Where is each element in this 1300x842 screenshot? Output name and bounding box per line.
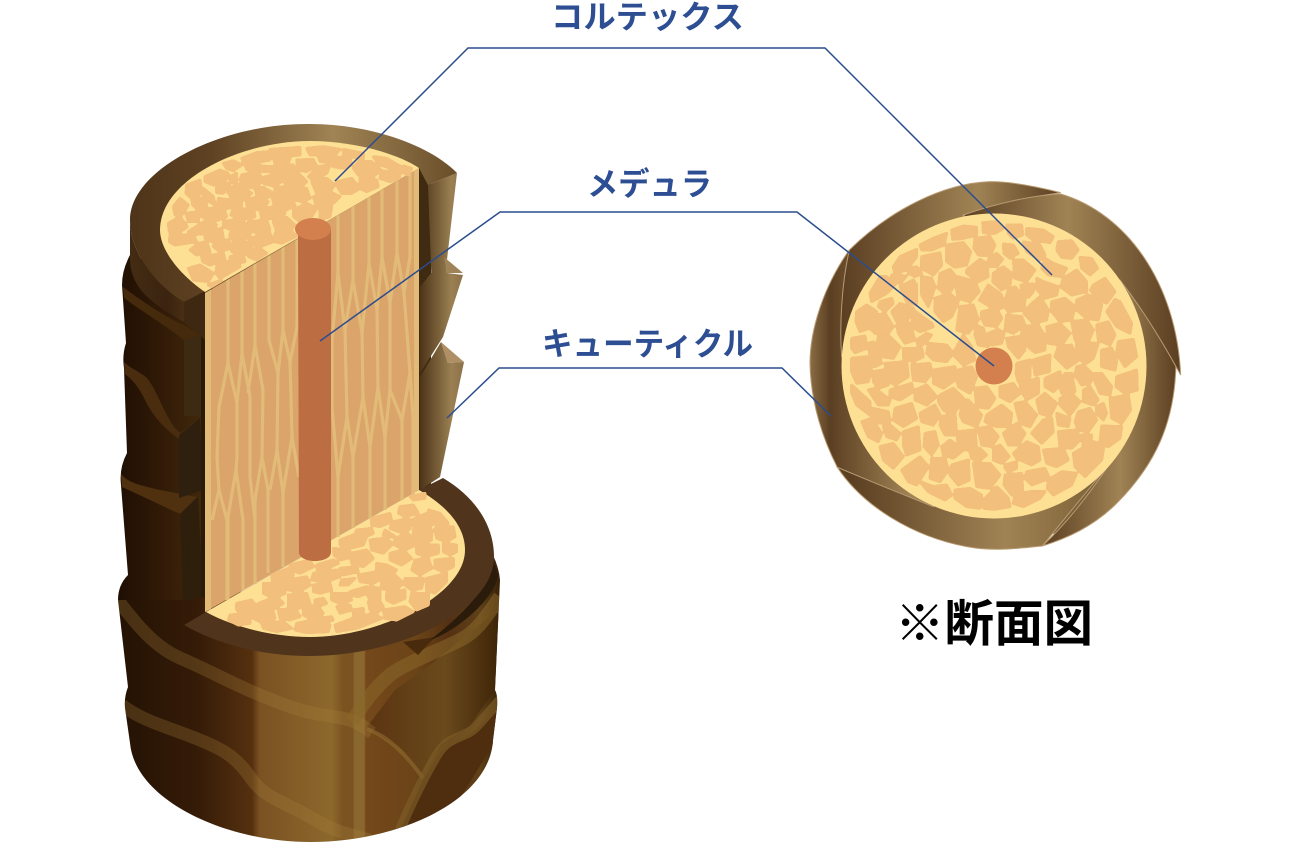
cuticle scale: top left	[841, 182, 1061, 357]
fold band: upper left	[116, 598, 372, 733]
top ring and cross-section	[130, 124, 457, 340]
cortex disc	[842, 214, 1146, 518]
ring base	[816, 188, 1172, 544]
label: cuticle: キューティクル	[542, 326, 753, 362]
medulla column	[295, 218, 331, 561]
label: medulla: メデュラ	[587, 166, 712, 202]
hair strand cutaway illustration	[116, 124, 500, 842]
cuticle scale: bottom	[837, 463, 1110, 549]
cortex cells: top face	[168, 147, 412, 287]
bottom ring and cross-section	[184, 478, 494, 656]
cuticle scale: bottom right	[1042, 280, 1176, 546]
cuticle scale: top right	[963, 194, 1181, 375]
shaded wedge: right lower	[400, 708, 497, 830]
cortex cells	[852, 222, 1137, 509]
shaded wedge: right middle	[367, 609, 499, 760]
leader line: cuticle	[447, 368, 831, 418]
cylinder lower body	[116, 555, 500, 842]
cortex cells: bottom face	[228, 493, 457, 633]
medulla dot	[976, 348, 1012, 384]
cross-section diagram	[810, 182, 1181, 549]
fold band: upper right	[352, 597, 500, 722]
cuticle scale: left	[810, 250, 933, 508]
leader line: medulla	[320, 212, 994, 366]
outer cuticle left stacked tiers	[118, 255, 205, 640]
label: cortex: コルテックス	[551, 0, 744, 35]
fold band: lower right	[400, 700, 500, 830]
leader line: cortex	[335, 48, 1052, 275]
caption: cross-section note: ※断面図	[895, 596, 1093, 652]
fold band: lower left	[122, 705, 370, 840]
right side cuticle scales	[419, 168, 464, 493]
cut face with fibres	[205, 168, 419, 612]
fold band: thin crossing	[367, 729, 423, 778]
